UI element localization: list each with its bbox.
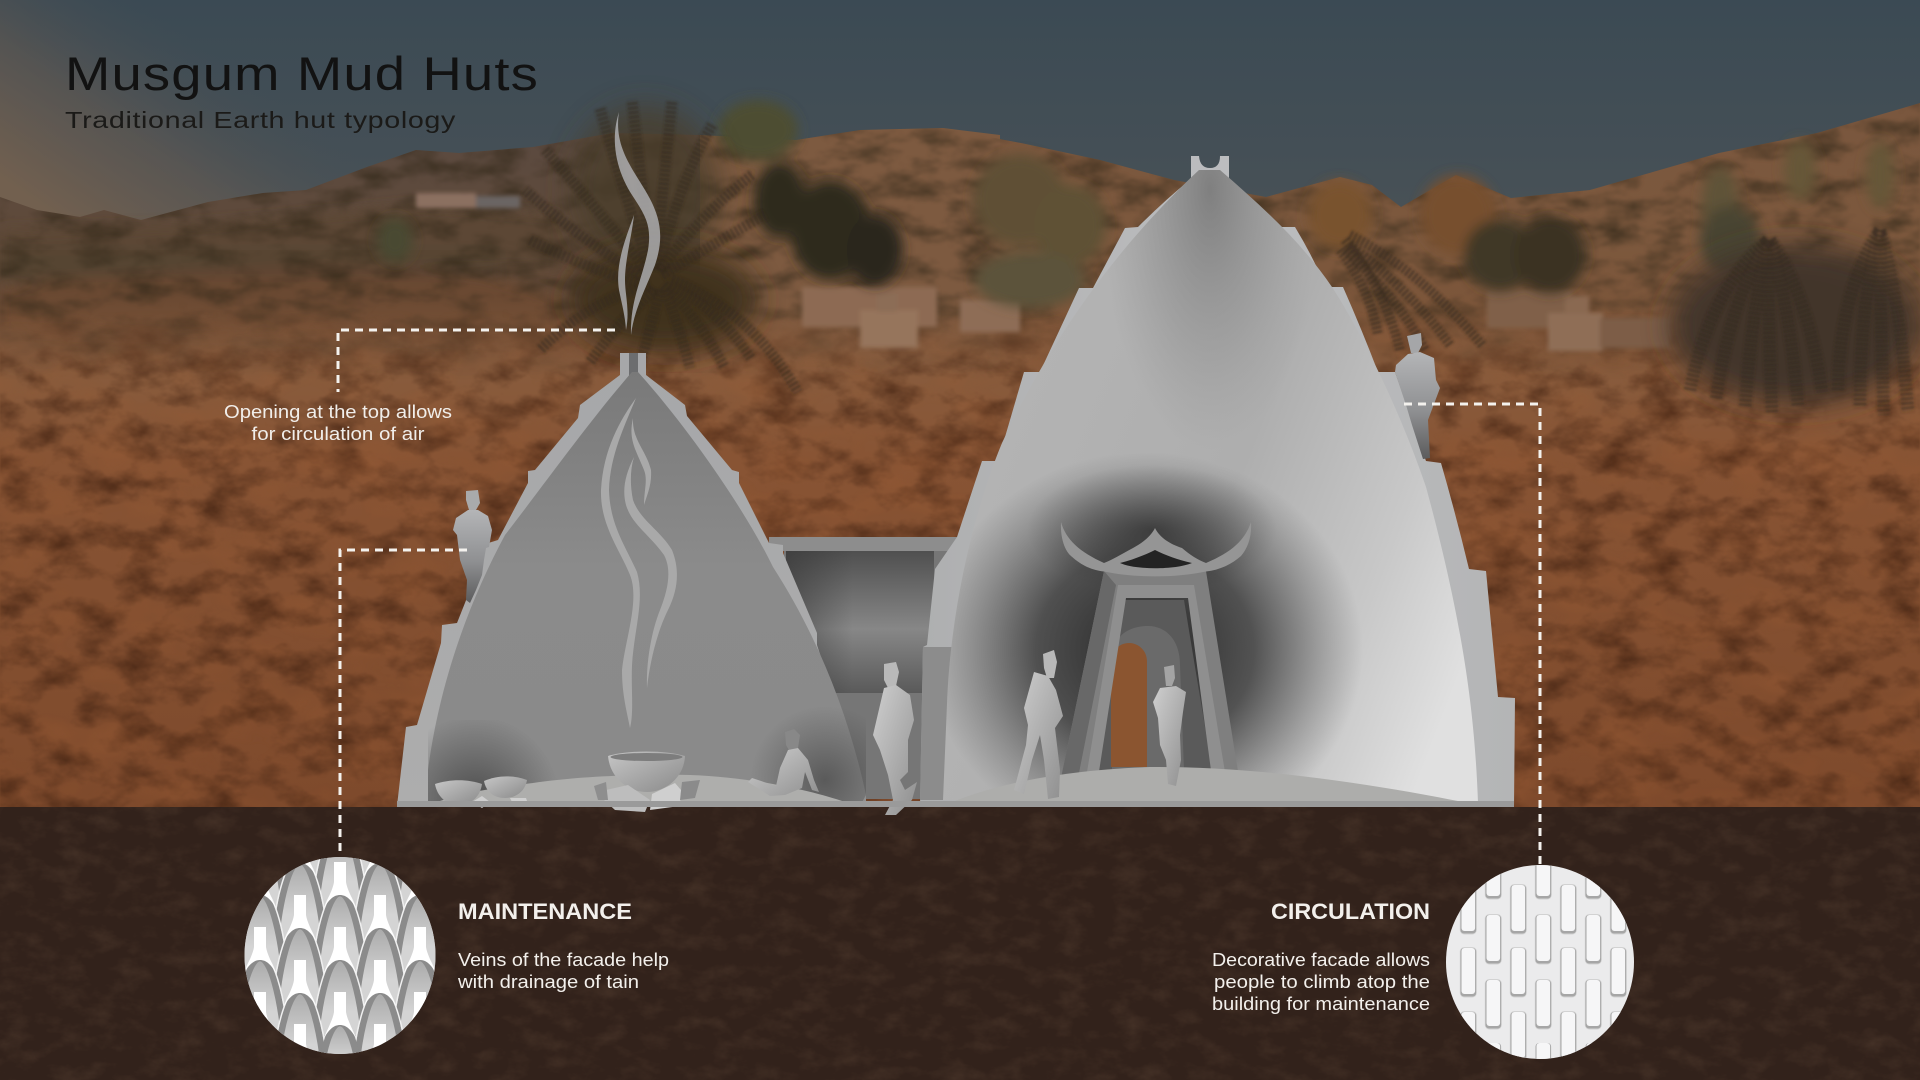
far hills and skyline — [0, 103, 1920, 385]
right hut section — [920, 156, 1515, 806]
right hut interior — [943, 170, 1478, 803]
callout text: air opening: Opening at the top allows — [224, 402, 452, 422]
right hut floor — [943, 767, 1478, 806]
foreground ground — [0, 295, 1920, 807]
small bowl right — [484, 776, 527, 798]
fire bowl — [608, 752, 685, 792]
lower shell block — [920, 647, 957, 800]
callout text: air opening: for circulation of air — [252, 424, 425, 444]
leader line: circulation — [1404, 404, 1540, 865]
standing figure between huts — [873, 662, 917, 815]
subtitle: Traditional Earth hut typology — [65, 107, 456, 133]
ground seam under huts — [397, 801, 1514, 807]
trees — [377, 100, 1894, 308]
body: circulation: Decorative facade allows — [1212, 950, 1430, 970]
seated figure — [748, 729, 819, 796]
text block: maintenance — [457, 899, 669, 992]
left hut floor — [428, 775, 856, 806]
body: circulation — [1212, 950, 1430, 1014]
figure climbing right hut — [1395, 333, 1440, 459]
central palm — [525, 100, 798, 392]
landscape mottling — [0, 103, 1920, 364]
left hut shell — [397, 353, 866, 806]
title block — [65, 47, 539, 133]
crescent lintel — [1061, 522, 1251, 576]
figure in doorway — [1153, 665, 1186, 786]
heading: circulation: CIRCULATION — [1271, 899, 1430, 924]
leader line: maintenance — [340, 550, 467, 857]
fire stones — [472, 780, 700, 812]
portal legs — [1061, 571, 1239, 778]
village buildings — [416, 193, 1670, 351]
sky — [0, 0, 1920, 300]
lintel eye — [1120, 550, 1192, 568]
door opening showing landscape — [1111, 643, 1147, 767]
small bowl left — [435, 780, 482, 805]
portal inner frame — [1086, 585, 1226, 778]
body: maintenance — [457, 950, 669, 992]
figure climbing left hut — [453, 490, 492, 603]
detail circle: maintenance facade veins — [244, 857, 436, 1054]
body: maintenance: with drainage of tain — [457, 972, 639, 992]
smoke inside left hut — [601, 398, 677, 728]
left hut section — [397, 353, 917, 815]
detail circle: circulation facade pattern — [1446, 865, 1634, 1059]
body: maintenance: Veins of the facade help — [458, 950, 669, 970]
right hut shell — [920, 156, 1515, 806]
village terraces — [0, 205, 560, 345]
connecting wall between huts — [769, 537, 964, 799]
palm beside large hut — [1340, 235, 1482, 350]
text block: circulation — [1212, 899, 1430, 1014]
body: circulation: people to climb atop the — [1214, 972, 1430, 992]
smoke rising from left hut — [615, 112, 660, 335]
leader line: air opening — [338, 330, 615, 392]
right palms — [1670, 230, 1920, 415]
callout: air opening — [224, 330, 615, 444]
door arch ring — [1112, 626, 1184, 770]
underground soil band — [0, 807, 1920, 1080]
ground mottling — [0, 300, 1920, 807]
walking figure — [1014, 650, 1063, 799]
doorway — [1061, 522, 1251, 778]
body: circulation: building for maintenance — [1212, 994, 1430, 1014]
door inner recess — [1098, 600, 1212, 770]
callout text: air opening — [224, 402, 452, 444]
heading: maintenance: MAINTENANCE — [458, 899, 632, 924]
left hut interior — [428, 353, 866, 806]
title: Musgum Mud Huts — [65, 47, 539, 100]
